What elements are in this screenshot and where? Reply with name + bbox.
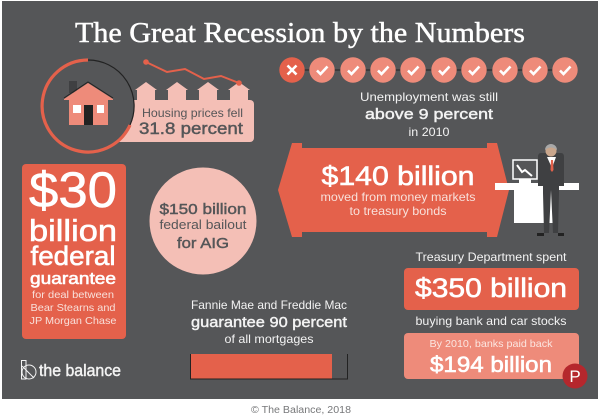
guarantee text: federal	[30, 241, 116, 271]
guarantee text: JP Morgan Chase	[30, 315, 117, 327]
AIG text: $150 billion	[160, 201, 246, 218]
panel: unemployment	[279, 57, 578, 139]
unemployment text: above 9 percent	[365, 106, 494, 123]
arrow text	[320, 161, 476, 218]
guarantee text: billion	[29, 213, 117, 248]
guarantee text: Bear Stearns and	[30, 302, 116, 314]
AIG text: for AIG	[177, 235, 229, 252]
unemployment text	[360, 90, 498, 139]
falling price line	[143, 59, 242, 86]
$350 billion box: $350 billion	[415, 273, 567, 303]
$194 billion box	[404, 333, 579, 379]
copyright footer: © The Balance, 2018	[251, 405, 351, 416]
icon: pinterest button	[562, 364, 588, 388]
AIG text	[160, 201, 247, 252]
arrow text: to treasury bonds	[350, 204, 446, 218]
$350 billion box	[404, 268, 579, 310]
guarantee text: $30	[29, 162, 117, 218]
housing text: Housing prices fell	[142, 106, 243, 120]
panel: Fannie Mae and Freddie Mac	[190, 298, 348, 379]
guarantee text	[29, 162, 117, 327]
title: The Great Recession by the Numbers	[75, 18, 525, 49]
unemployment text: Unemployment was still	[360, 90, 498, 104]
mortgage text: guarantee 90 percent	[191, 314, 348, 331]
AIG text: federal bailout	[160, 218, 247, 232]
$194 billion box: $194 billion	[430, 352, 552, 377]
logo: the balance: the balance	[39, 361, 121, 380]
ring gauge	[42, 60, 134, 152]
icon: businessman at desk	[495, 144, 579, 236]
housing text	[139, 106, 243, 138]
icon: pinterest button: P	[569, 367, 581, 386]
panel: AIG bailout circle	[150, 168, 256, 274]
mortgage text: Fannie Mae and Freddie Mac	[191, 298, 347, 312]
panel: $30 billion guarantee	[22, 162, 126, 339]
icon: house	[64, 81, 113, 125]
panel: Treasury Department	[404, 250, 579, 379]
$194 billion box: By 2010, banks paid back	[430, 338, 553, 350]
housing text: 31.8 percent	[139, 120, 243, 138]
mortgage text	[191, 298, 348, 346]
guarantee text: guarantee	[30, 269, 116, 288]
mortgage text: of all mortgages	[224, 332, 314, 346]
double arrow	[278, 143, 509, 237]
guarantee text: for deal between	[32, 289, 114, 301]
arrow text: $140 billion	[322, 161, 474, 191]
panel: $140 billion arrow	[278, 143, 509, 237]
connector line	[292, 69, 565, 71]
pink sign with house row	[118, 82, 254, 142]
arrow text: moved from money markets	[320, 190, 476, 204]
treasury label: Treasury Department spent	[416, 250, 567, 264]
icon row: x and checks	[279, 57, 578, 83]
unemployment text: in 2010	[408, 125, 450, 139]
buying label: buying bank and car stocks	[416, 314, 566, 328]
progress bar	[190, 354, 348, 379]
panel: housing prices	[42, 59, 254, 152]
